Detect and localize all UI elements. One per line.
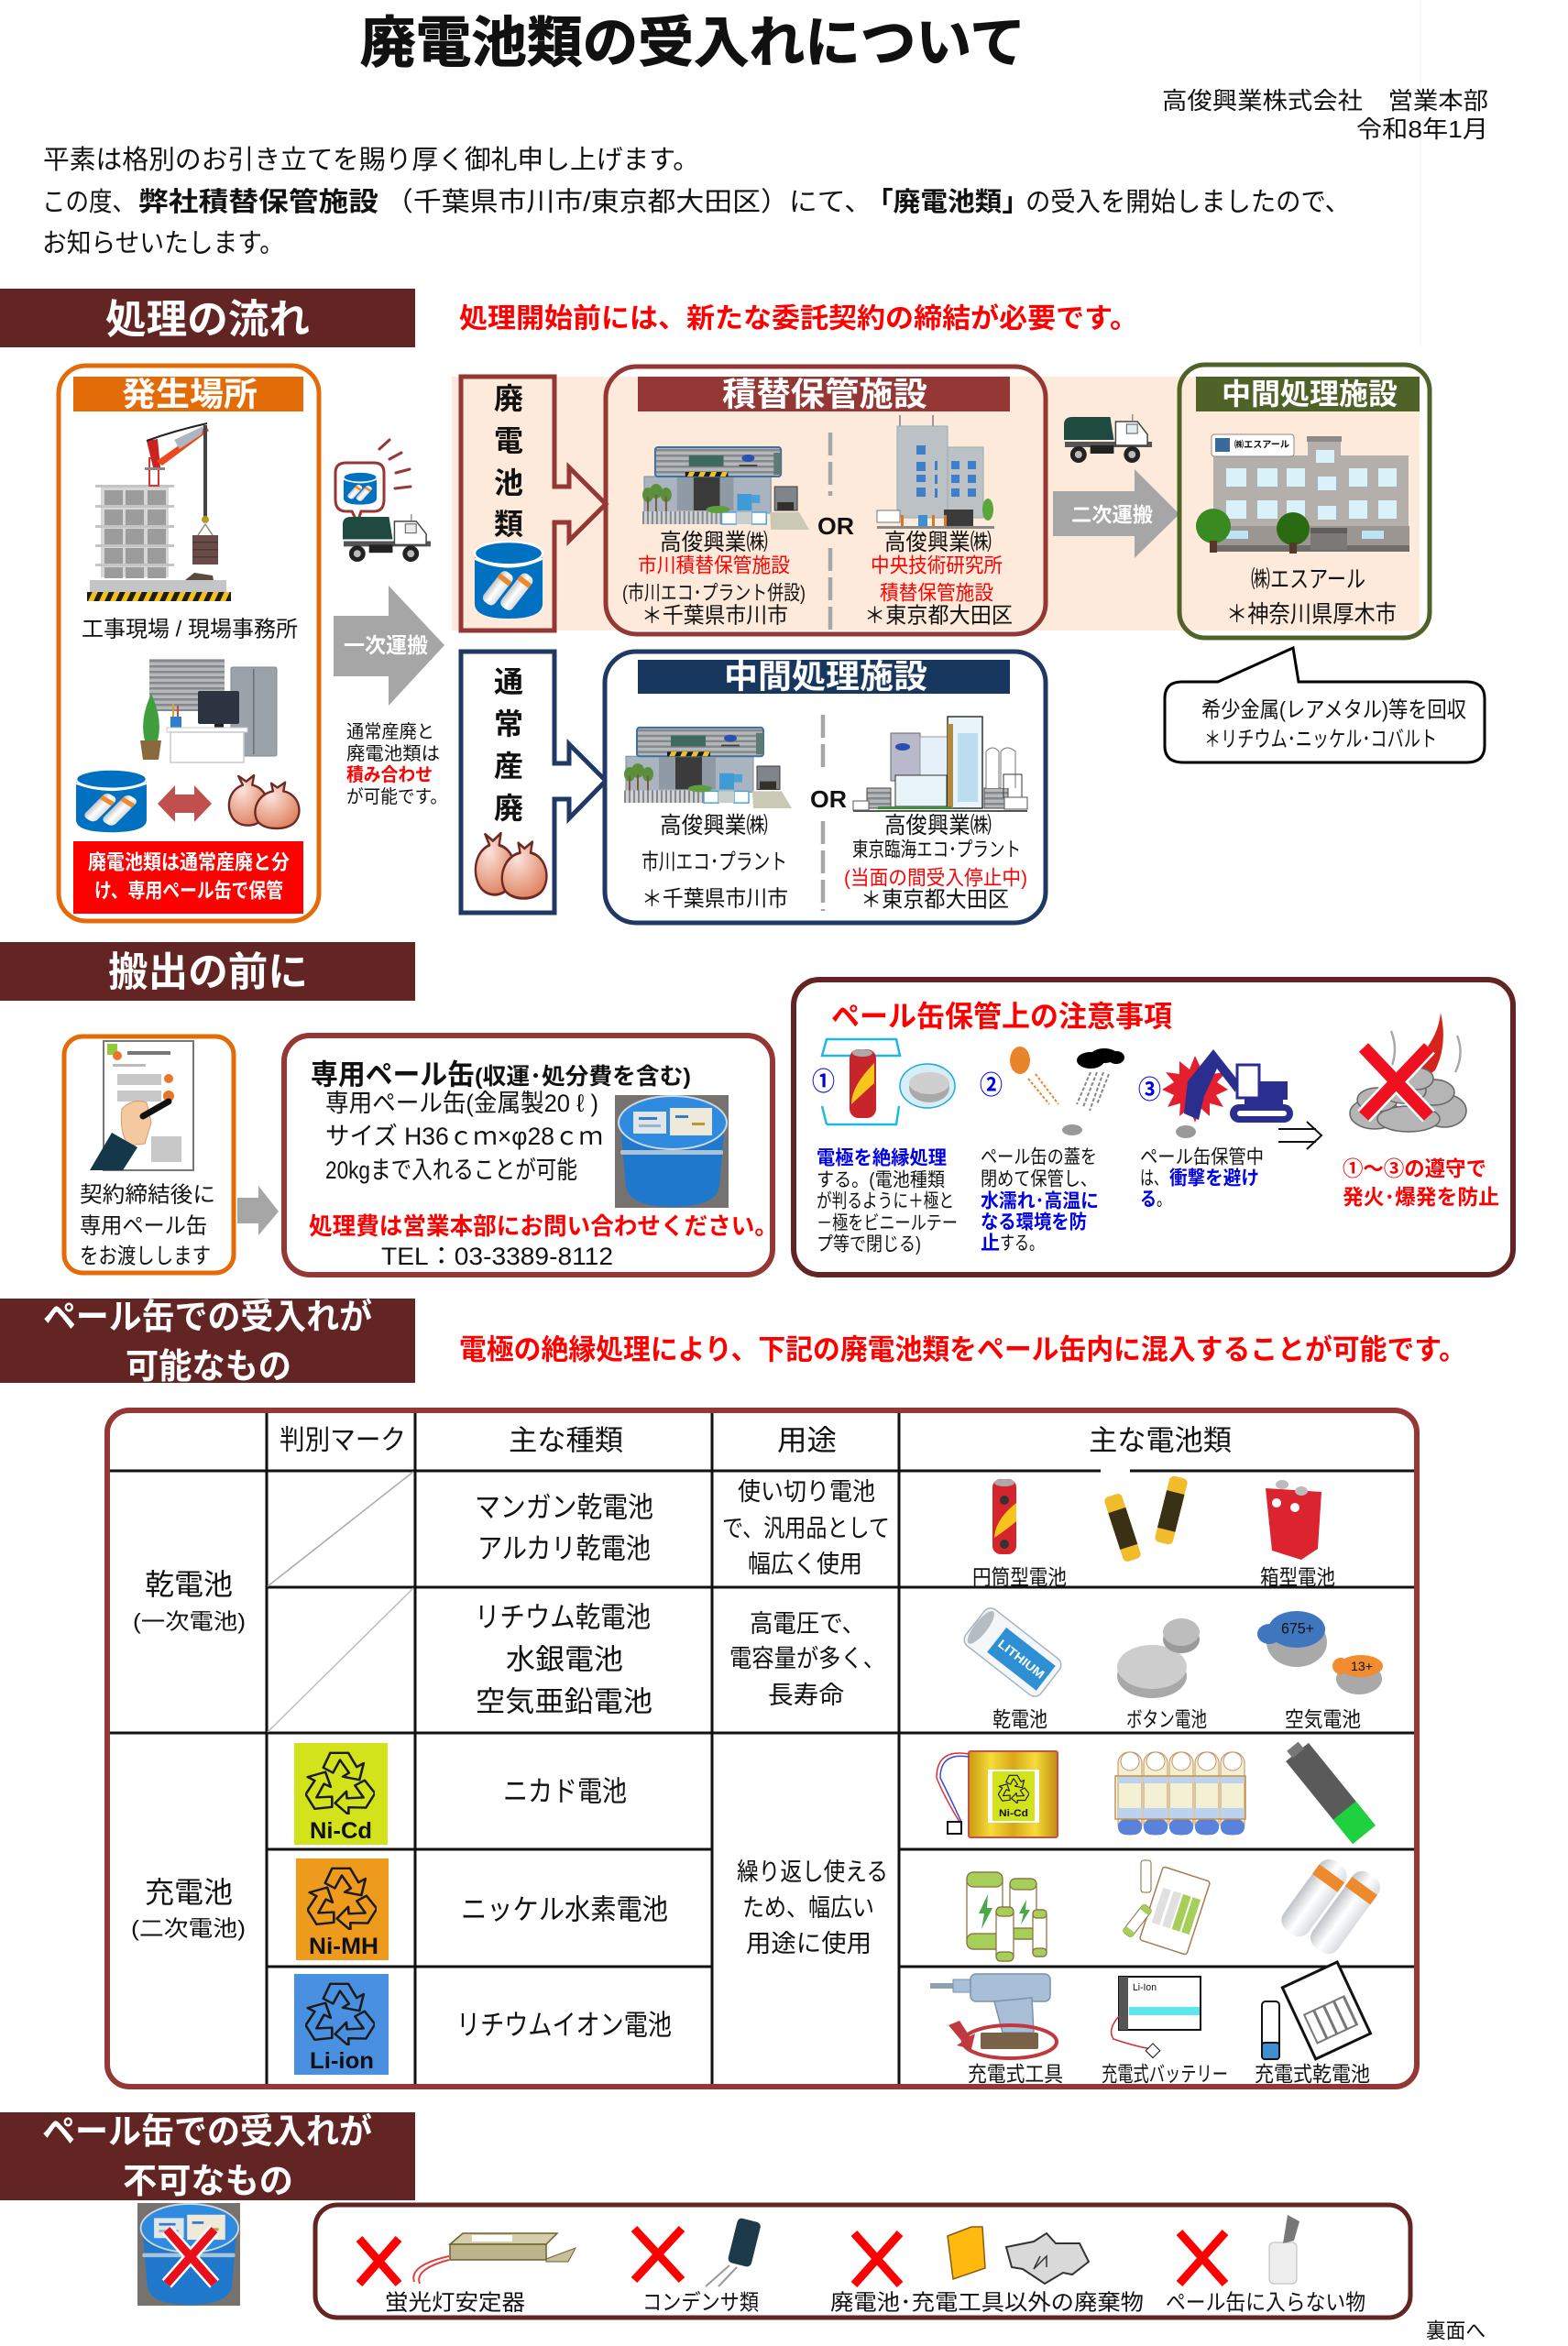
text: Ichikawa plant: ＊千葉県市川市: [641, 887, 788, 911]
section header: not acceptable: 不可なもの: [123, 2163, 293, 2201]
text: S.R. company and location: ㈱エスアール: [1251, 565, 1365, 593]
row text: manganese and alkaline: アルカリ乾電池: [477, 1532, 651, 1565]
text: Tokyo Rinkai plant: ＊東京都大田区: [861, 887, 1009, 913]
text: step 2: する。: [1000, 1233, 1044, 1254]
section header: not acceptable: [0, 2112, 415, 2201]
note: store separately: [73, 841, 303, 914]
panel: not acceptable items: [315, 2205, 1410, 2318]
arrow: contract to pail: [237, 1186, 279, 1235]
intro text: 弊社積替保管施設: [138, 187, 378, 217]
icon: cylindrical battery: [992, 1479, 1016, 1554]
step 1: insulate terminals: [812, 1039, 958, 1255]
row text: rechargeable types: 用途に使用: [746, 1930, 872, 1957]
step 2: keep away from water and heat: [980, 1047, 1124, 1254]
item: other waste: [830, 2227, 1144, 2315]
item: fluorescent ballast: 蛍光灯安定器: [385, 2291, 525, 2315]
icon: Tokyo Rinkai plant: [853, 717, 1027, 812]
text: step 3: [1140, 1147, 1264, 1210]
mark: Ni-MH: [296, 1858, 389, 1960]
labels: row 5: [968, 2062, 1370, 2086]
text: Tokyo Rinkai plant: 東京臨海エコ･プラント: [852, 838, 1021, 861]
text: Ichikawa plant: 高俊興業㈱: [660, 813, 768, 839]
text: Ichikawa facility: [622, 530, 806, 629]
text: pail specification: [325, 1090, 603, 1184]
panel: contract and pail handover: [64, 1036, 234, 1273]
section header: before shipment: 搬出の前に: [108, 949, 308, 995]
intro text: 平素は格別のお引き立てを賜り厚く御礼申し上げます。: [43, 145, 699, 175]
table: acceptable batteries: [107, 1410, 1417, 2087]
intro text: お知らせいたします。: [42, 228, 284, 258]
icon: Ni-Cd pack: [937, 1751, 1058, 1837]
text: Ichikawa facility: ＊千葉県市川市: [641, 603, 788, 629]
table header row: 用途: [777, 1424, 837, 1457]
table header row: 主な種類: [509, 1424, 623, 1457]
icon: box battery: [1266, 1480, 1321, 1560]
text: Ichikawa facility: 市川積替保管施設: [638, 554, 790, 577]
mark: Ni-MH: Ni-MH: [309, 1934, 378, 1959]
text: step 3: は、: [1140, 1168, 1168, 1189]
text: mixed loading allowed: が可能です。: [346, 786, 447, 807]
text: pail after contract: 専用ペール缶: [80, 1213, 207, 1239]
section header: acceptable items: ペール缶での受入れが: [43, 1299, 372, 1337]
row text: lithium, mercury, zinc air: 高電圧で、: [750, 1610, 865, 1638]
icon: Ni-Cd pack: Ni-Cd: [999, 1808, 1028, 1819]
arrow: primary transport: [334, 586, 444, 706]
text: step 3: 。: [1157, 1189, 1171, 1210]
box arrow: waste batteries: [461, 377, 606, 630]
issuer and date: 令和8年1月: [1356, 115, 1488, 143]
text: mixed loading allowed: 通常産廃と: [346, 721, 434, 742]
text: Ichikawa plant: [641, 813, 788, 911]
text: step 1: が判るように＋極と: [817, 1191, 954, 1211]
step 3: avoid impact: [1138, 1049, 1293, 1210]
icon: signing a contract: [90, 1041, 193, 1170]
icon: rechargeable battery pack: Li-Ion: [1133, 1982, 1157, 1993]
text: step 1: 電極を絶縁処理: [817, 1147, 947, 1169]
text: S.R. company and location: ＊神奈川県厚木市: [1226, 600, 1397, 628]
row text: lithium, mercury, zinc air: 電容量が多く、: [729, 1645, 885, 1672]
table grid: [110, 1412, 1415, 2086]
icon: truck with pail speech bubble: [335, 440, 431, 562]
issuer and date: 高俊興業株式会社 営業本部: [1162, 87, 1488, 115]
text: step 2: 閉めて保管し、: [981, 1169, 1097, 1189]
text: Tokyo Rinkai plant: [844, 813, 1027, 913]
icon: pail can: [76, 770, 147, 832]
text: Ota facility: 高俊興業㈱: [884, 530, 992, 555]
text: Tokyo Rinkai plant: (当面の間受入停止中): [844, 867, 1027, 889]
text: mixed loading allowed: [346, 721, 447, 807]
heading: transfer storage: 積替保管施設: [722, 376, 927, 412]
heading: intermediate treatment: [638, 658, 1010, 695]
intro text: この度、: [42, 187, 136, 217]
labels: row 2: 乾電池: [992, 1707, 1047, 1731]
icon: construction site with crane: [87, 423, 231, 601]
icon: battery charger: [1123, 1860, 1211, 1955]
box arrow: waste batteries: 池: [494, 466, 523, 499]
text: pail after contract: 契約締結後に: [80, 1182, 215, 1208]
text: step 2: なる環境を防: [981, 1211, 1087, 1233]
row text: lithium, mercury, zinc air: 空気亜鉛電池: [476, 1686, 652, 1717]
icon: Ichikawa warehouse: [642, 447, 809, 530]
icon: lithium battery: LITHIUM: [995, 1637, 1047, 1682]
mark: Li-ion: [294, 1974, 389, 2075]
text: Ota facility: ＊東京都大田区: [864, 603, 1013, 629]
box arrow: waste batteries: 類: [494, 508, 523, 541]
step 3: avoid impact: ③: [1138, 1076, 1161, 1103]
divider with OR: OR: [810, 785, 847, 813]
row text: rechargeable types: ニッケル水素電池: [461, 1893, 668, 1926]
icon: waste bags: [476, 833, 546, 898]
text: Tokyo Rinkai plant: 高俊興業㈱: [884, 813, 992, 839]
heading: dedicated pail: (収運･処分費を含む): [475, 1064, 691, 1090]
red notice: new contract required: 処理開始前には、新たな委託契約の締結が必要です。: [459, 302, 1138, 334]
icon: rechargeable battery pack: [1112, 1977, 1201, 2057]
icon: battery cell pack: [1115, 1752, 1245, 1835]
text: mixed loading allowed: 廃電池類は: [346, 743, 440, 764]
callout: rare metal recovery: [1165, 648, 1485, 762]
heading: precautions: ペール缶保管上の注意事項: [831, 1000, 1172, 1033]
row text: manganese and alkaline: [475, 1478, 890, 1578]
icon: battery fire crossed out: [1350, 1013, 1466, 1132]
peach band behind battery route: [452, 377, 1420, 630]
icon: site office: [140, 659, 277, 762]
row text: manganese and alkaline: で、汎用品として: [722, 1515, 890, 1542]
divider with OR: OR: [817, 512, 854, 540]
text: S.R. company and location: [1226, 565, 1397, 628]
box arrow: ordinary industrial waste: 産: [494, 750, 523, 783]
intro text: [42, 145, 1350, 258]
table header row: [280, 1424, 1232, 1457]
row text: lithium, mercury, zinc air: [475, 1602, 885, 1717]
text: step 3: る: [1140, 1189, 1157, 1210]
text: step 3: 衝撃を避け: [1169, 1168, 1259, 1189]
panel: intermediate treatment (ordinary waste): [605, 652, 1046, 923]
row text: rechargeable types: ニカド電池: [503, 1776, 627, 1807]
row text: rechargeable types: 繰り返し使える: [737, 1858, 888, 1886]
section header: process flow: [0, 289, 415, 347]
icon: air batteries: [1257, 1611, 1383, 1694]
mark: Li-ion: Li-ion: [310, 2048, 374, 2074]
heading: intermediate treatment: 中間処理施設: [1222, 378, 1398, 411]
text: step 2: [981, 1147, 1099, 1254]
text: see reverse: 裏面へ: [1426, 2319, 1486, 2342]
panel: intermediate treatment facility (S.R.): [1179, 365, 1430, 638]
icon: secondary transport truck: [1064, 414, 1152, 463]
item: capacitor: コンデンサ類: [642, 2291, 759, 2315]
heading: intermediate treatment: 中間処理施設: [724, 658, 927, 695]
row text: manganese and alkaline: マンガン乾電池: [475, 1492, 653, 1523]
icon: button batteries: [1117, 1618, 1200, 1698]
icon: air batteries: 13+: [1351, 1659, 1373, 1673]
text: Ota facility: 積替保管施設: [880, 581, 993, 605]
table header row: 主な電池類: [1089, 1424, 1232, 1457]
photo: pail can: [615, 1095, 729, 1208]
text: pail specification: 20kgまで入れることが可能: [325, 1157, 577, 1184]
row text: lithium, mercury, zinc air: リチウム乾電池: [475, 1602, 651, 1633]
labels: row 5: 充電式バッテリー: [1102, 2062, 1228, 2086]
box arrow: waste batteries: 電: [494, 424, 523, 457]
heading: generation site: [73, 376, 303, 412]
text: step 1: プ等で閉じる): [817, 1233, 921, 1255]
icon: central research office: [877, 415, 994, 529]
panel: transfer storage facilities: [606, 367, 1046, 634]
icon: S.R. building: [1196, 434, 1409, 554]
text: phone number: TEL：03-3389-8112: [381, 1243, 613, 1270]
heading: transfer storage: [638, 376, 1010, 412]
labels: row 5: 充電式乾電池: [1255, 2062, 1370, 2086]
text: pail after contract: [80, 1182, 215, 1268]
labels: row 2: [992, 1707, 1361, 1731]
text: mixed loading allowed: 積み合わせ: [346, 764, 433, 785]
labels: row 1: 円筒型電池: [972, 1565, 1067, 1589]
labels: row 1: 箱型電池: [1260, 1565, 1335, 1589]
section header: acceptable items: [0, 1299, 415, 1387]
text: prevent fire: 発火･爆発を防止: [1343, 1185, 1499, 1209]
item: other waste: 廃電池･充電工具以外の廃棄物: [830, 2291, 1144, 2315]
text: prevent fire: [1343, 1157, 1499, 1209]
box arrow: ordinary industrial waste: 常: [494, 707, 523, 740]
table header row: 判別マーク: [280, 1426, 406, 1455]
item: fluorescent ballast: [359, 2233, 576, 2315]
icon: green level battery: [1281, 1738, 1376, 1844]
icon: green rechargeable batteries: [967, 1872, 1047, 1961]
issuer and date: [1162, 87, 1488, 143]
icon: lithium battery: [961, 1605, 1064, 1700]
row text: manganese and alkaline: 使い切り電池: [738, 1478, 875, 1506]
group label: primary cells: [133, 1568, 246, 1635]
heading: dedicated pail: 専用ペール缶: [311, 1059, 475, 1091]
icon: AA charger and cell: [1262, 1962, 1371, 2059]
intro text: （千葉県市川市/東京都大田区）にて、: [385, 187, 872, 217]
arrow: primary transport: 一次運搬: [344, 633, 428, 657]
row text: manganese and alkaline: 幅広く使用: [748, 1551, 862, 1578]
item: items that do not fit: ペール缶に入らない物: [1166, 2291, 1365, 2315]
photo: pail with cross: [137, 2203, 240, 2306]
arrow: double arrow: [1278, 1122, 1321, 1149]
step 1: insulate terminals: ①: [812, 1067, 835, 1096]
row text: rechargeable types: ため、幅広い: [742, 1894, 874, 1922]
arrow: separate storage: [158, 785, 212, 822]
text: Ichikawa plant: 市川エコ･プラント: [641, 850, 787, 874]
label: site or office: 工事現場 / 現場事務所: [82, 618, 298, 641]
item: items that do not fit: [1166, 2215, 1365, 2315]
arrow: secondary transport: [1053, 469, 1179, 558]
group label: secondary cells: [131, 1876, 246, 1941]
red notice: insulation allows mixing: 電極の絶縁処理により、下記の廃電池類をペール缶内に混入することが可能です。: [459, 1334, 1466, 1365]
arrow: secondary transport: 二次運搬: [1071, 504, 1153, 526]
panel: generation site: [59, 366, 319, 921]
box arrow: ordinary industrial waste: 廃: [494, 792, 523, 825]
icon: S.R. building: ㈱エスアール: [1234, 438, 1289, 451]
section header: before shipment: [0, 942, 415, 1001]
row text: rechargeable types: リチウムイオン電池: [456, 2009, 672, 2042]
icon: AA batteries: [1103, 1475, 1189, 1562]
intro text: の受入を開始しましたので、: [1025, 187, 1350, 217]
callout: rare metal recovery: 希少金属(レアメタル)等を回収: [1201, 698, 1466, 722]
text: Ichikawa facility: 高俊興業㈱: [660, 530, 768, 555]
note: store separately: 廃電池類は通常産廃と分: [88, 850, 290, 874]
heading: dedicated pail: [311, 1059, 691, 1091]
mark: Ni-Cd: [294, 1743, 388, 1845]
box arrow: ordinary industrial waste: 通: [494, 665, 523, 698]
text: step 2: ペール缶の蓋を: [981, 1147, 1097, 1168]
section header: process flow: 処理の流れ: [105, 297, 310, 343]
text: Ota facility: 中央技術研究所: [871, 554, 1003, 577]
icon: white AA batteries: [1277, 1855, 1385, 1958]
callout: rare metal recovery: ＊リチウム･ニッケル･コバルト: [1204, 728, 1437, 751]
mark: Ni-Cd: Ni-Cd: [310, 1818, 372, 1844]
labels: row 5: 充電式工具: [968, 2062, 1063, 2086]
row text: rechargeable types: [456, 1776, 888, 2042]
row text: lithium, mercury, zinc air: 水銀電池: [506, 1644, 623, 1675]
group label: primary cells: (一次電池): [133, 1609, 246, 1635]
step 2: keep away from water and heat: ②: [980, 1070, 1003, 1100]
icon: waste bags: [229, 775, 299, 828]
group label: primary cells: 乾電池: [145, 1568, 233, 1601]
group label: secondary cells: (二次電池): [131, 1917, 246, 1941]
text: step 1: －極をビニールテー: [817, 1213, 958, 1233]
icon: Ichikawa plant: [624, 728, 792, 808]
text: step 1: [817, 1147, 958, 1255]
group label: secondary cells: 充電池: [145, 1876, 233, 1909]
text: step 3: ペール缶保管中: [1140, 1147, 1264, 1168]
title: 廃電池類の受入れについて: [360, 13, 1025, 73]
text: pail after contract: をお渡しします: [80, 1244, 211, 1268]
text: step 2: 水濡れ･高温に: [981, 1191, 1099, 1211]
labels: row 1: [972, 1565, 1335, 1589]
labels: row 2: ボタン電池: [1126, 1707, 1207, 1731]
item: capacitor: [634, 2218, 762, 2315]
icon: cordless drill: [930, 1974, 1057, 2058]
note: store separately: け、専用ペール缶で保管: [94, 880, 283, 902]
text: Ichikawa facility: (市川エコ･プラント併設): [622, 581, 806, 605]
box arrow: waste batteries: 廃: [494, 382, 523, 415]
text: step 2: 止: [981, 1233, 1000, 1254]
box arrow: ordinary industrial waste: [461, 652, 606, 913]
text: price enquiry: 処理費は営業本部にお問い合わせください。: [309, 1212, 778, 1240]
text: prevent fire: ①～③の遵守で: [1343, 1157, 1486, 1180]
text: step 1: する。(電池種類: [817, 1169, 945, 1191]
labels: row 2: 空気電池: [1285, 1707, 1361, 1731]
text: pail specification: サイズ H36ｃｍ×φ28ｃｍ: [325, 1123, 603, 1150]
icon: air batteries: 675+: [1281, 1620, 1314, 1637]
icon: pail can: [475, 542, 543, 619]
section header: acceptable items: 可能なもの: [126, 1348, 291, 1387]
heading: generation site: 発生場所: [122, 376, 258, 412]
row text: lithium, mercury, zinc air: 長寿命: [768, 1682, 844, 1709]
section header: not acceptable: ペール缶での受入れが: [42, 2113, 372, 2152]
panel: pail storage precautions: [794, 980, 1513, 1275]
text: Ota facility: [864, 530, 1013, 629]
text: pail specification: 専用ペール缶(金属製20 ℓ ): [325, 1090, 598, 1117]
panel: dedicated pail: [284, 1036, 778, 1275]
intro text: 「廃電池類」: [866, 187, 1029, 217]
